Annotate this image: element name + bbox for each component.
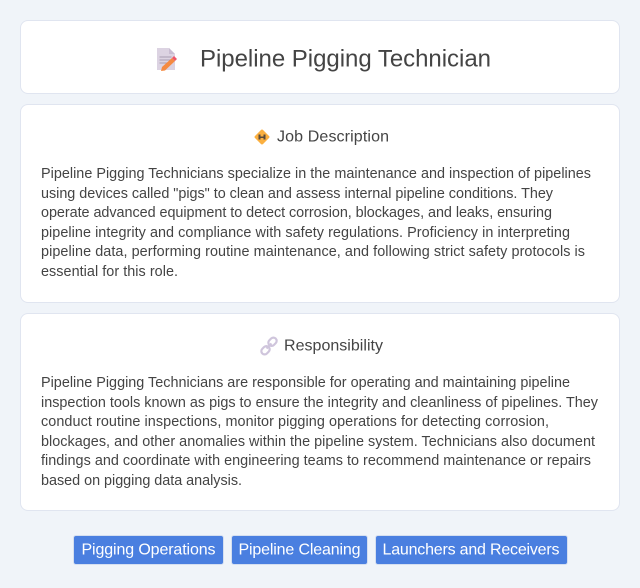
text: job description body: pipeline data, performing routine maintenance, and following strict safety protocols is <box>41 244 585 260</box>
panel: job description <box>20 104 620 303</box>
text: job description body: pipeline integrity and compliance with safety regulations. Proficiency in interpreting <box>41 225 570 241</box>
text: job description body: operate advanced equipment to detect corrosion, blockages, and leaks, ensuring <box>41 205 552 221</box>
panel: responsibility <box>20 313 620 511</box>
tag: Pipeline Cleaning <box>230 535 368 565</box>
text: responsibility body: inspection tools known as pigs to ensure the integrity and cleanliness of pipelines. They <box>41 395 599 411</box>
icon: chain link <box>260 336 278 356</box>
tag: Pipeline Cleaning: Pipeline Cleaning <box>238 542 360 558</box>
tag: Pigging Operations: Pigging Operations <box>81 542 215 558</box>
tag: Launchers and Receivers <box>374 535 568 565</box>
text: responsibility body: conduct routine inspections, monitor pigging operations for detecting corrosion, <box>41 414 549 430</box>
text: job description body <box>41 166 591 280</box>
text: job description body: using devices called "pigs" to clean and assess internal pipeline conditions. They <box>41 186 554 202</box>
icon: document with pencil <box>157 48 177 71</box>
text: responsibility body: findings and coordinate with engineering teams to recommend maintenance or repairs <box>41 453 591 469</box>
tag: Pigging Operations <box>72 535 224 565</box>
text: responsibility body: Pipeline Pigging Technicians are responsible for operating and maintaining pipeline <box>41 375 570 391</box>
text: responsibility body <box>41 375 599 489</box>
heading: job description: Job Description <box>277 128 389 146</box>
icon: road sign <box>254 130 270 144</box>
text: job description body: Pipeline Pigging Technicians specialize in the maintenance and inspection of pipelines <box>41 166 591 182</box>
tag: Launchers and Receivers: Launchers and Receivers <box>382 542 559 558</box>
heading: responsibility: Responsibility <box>284 338 383 354</box>
text: responsibility body: based on pigging data analysis. <box>41 473 242 489</box>
text: responsibility body: blockages, and other anomalies within the pipeline system. Technicians also document <box>41 434 595 450</box>
panel: title card <box>20 20 620 94</box>
text: job description body: essential for this role. <box>41 264 178 280</box>
title: Pipeline Pigging Technician <box>200 46 491 72</box>
